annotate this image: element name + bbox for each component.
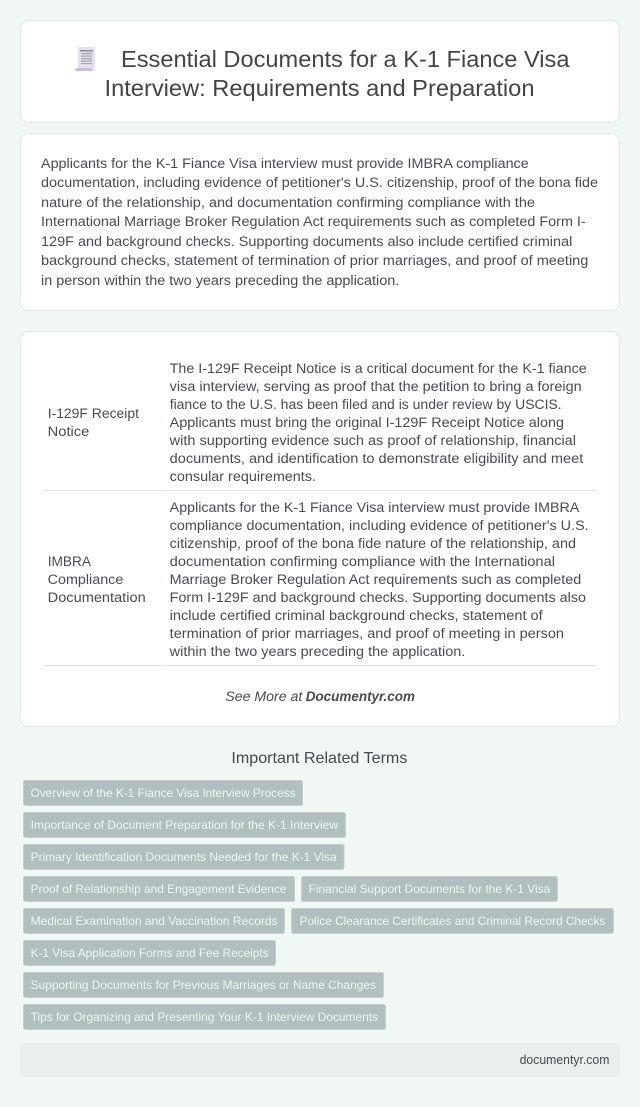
title	[104, 46, 570, 101]
row description: consular requirements.	[170, 469, 316, 485]
footer	[20, 1043, 620, 1077]
text block: summary: background checks, statement of termination of prior marriages, and proof of meeting	[41, 253, 588, 269]
row description: documents, and identification to demonstrate eligibility and meet	[170, 451, 583, 467]
row label: I-129F Receipt	[48, 406, 139, 422]
tag	[24, 812, 346, 838]
row description: Marriage Broker Regulation Act requirements such as completed	[170, 572, 581, 588]
panel: related term tags	[24, 780, 614, 1030]
row description: The I-129F Receipt Notice is a critical document for the K-1 fiance	[170, 361, 587, 377]
title: Essential Documents for a K-1 Fiance Visa	[121, 46, 570, 72]
row description: fiance to the U.S. has been filed and is under review by USCIS.	[170, 397, 562, 413]
text block: summary: in person within the two years preceding the application.	[41, 273, 399, 289]
tag	[24, 1004, 386, 1030]
footer: documentyr.com	[520, 1052, 609, 1067]
tag	[24, 876, 294, 902]
row description: documentation confirming compliance with the International	[170, 554, 555, 570]
row description: include certified criminal background checks, statement of	[170, 608, 543, 624]
tag: Tips for Organizing and Presenting Your K-1 Interview Documents	[31, 1010, 378, 1024]
row label: IMBRA	[48, 554, 92, 570]
heading: related terms: Important Related Terms	[231, 750, 407, 767]
text block: summary: Applicants for the K-1 Fiance Visa interview must provide IMBRA compliance	[41, 156, 529, 172]
tag: Proof of Relationship and Engagement Evidence	[31, 882, 287, 896]
row label	[48, 406, 139, 440]
tag	[24, 780, 302, 806]
row description	[169, 500, 589, 660]
tag: Supporting Documents for Previous Marriages or Name Changes	[31, 978, 376, 992]
row description: Applicants for the K-1 Fiance Visa interview must provide IMBRA	[170, 500, 580, 516]
row description: compliance documentation, including evidence of petitioner's U.S.	[170, 518, 589, 534]
tag	[24, 908, 284, 934]
tag	[24, 844, 344, 870]
title: Interview: Requirements and Preparation	[104, 75, 534, 101]
see more link: Documentyr.com	[306, 689, 415, 705]
tag: Medical Examination and Vaccination Records	[31, 914, 278, 928]
tag: Police Clearance Certificates and Criminal Record Checks	[300, 914, 605, 928]
see more link: See More at	[225, 689, 303, 705]
table row: IMBRA Compliance Documentation	[43, 500, 597, 666]
text block: summary	[41, 156, 598, 289]
tag: Primary Identification Documents Needed for the K-1 Visa	[31, 850, 337, 864]
row label	[48, 554, 146, 606]
row description: within the two years preceding the application.	[169, 644, 465, 660]
tag: Overview of the K-1 Fiance Visa Interview Process	[31, 786, 296, 800]
text block: summary: nature of the relationship, and documentation confirming compliance with the	[41, 195, 535, 211]
tag	[24, 972, 384, 998]
table row: I-129F Receipt Notice	[43, 361, 597, 490]
panel: summary paragraph	[20, 134, 620, 310]
tag	[292, 908, 614, 934]
tag: Importance of Document Preparation for the K-1 Interview	[31, 818, 338, 832]
row description: Form I-129F and background checks. Supporting documents also	[170, 590, 586, 606]
panel: title card	[20, 20, 620, 122]
row label: Compliance	[48, 572, 123, 588]
see more link	[225, 689, 415, 705]
text block: summary: documentation, including evidence of petitioner's U.S. citizenship, proof of the bona fide	[41, 175, 598, 191]
panel: documents table	[20, 332, 620, 726]
row description: citizenship, proof of the bona fide nature of the relationship, and	[170, 536, 576, 552]
icon: document scroll	[75, 47, 95, 71]
row description: visa interview, serving as proof that the petition to bring a foreign	[170, 379, 582, 395]
text block: summary: International Marriage Broker Regulation Act requirements such as completed Form I-	[41, 214, 586, 230]
text block: summary: 129F and background checks. Supporting documents also include certified criminal	[41, 234, 572, 250]
tag	[24, 940, 276, 966]
row label: Notice	[48, 424, 89, 440]
tag	[302, 876, 558, 902]
row description: termination of prior marriages, and proof of meeting in person	[170, 626, 564, 642]
row description: Applicants must bring the original I-129F Receipt Notice along	[170, 415, 564, 431]
row description: with supporting evidence such as proof of relationship, financial	[169, 433, 576, 449]
row label: Documentation	[48, 590, 146, 606]
tag: Financial Support Documents for the K-1 Visa	[309, 882, 551, 896]
tag: K-1 Visa Application Forms and Fee Receipts	[31, 946, 269, 960]
row description	[169, 361, 587, 485]
